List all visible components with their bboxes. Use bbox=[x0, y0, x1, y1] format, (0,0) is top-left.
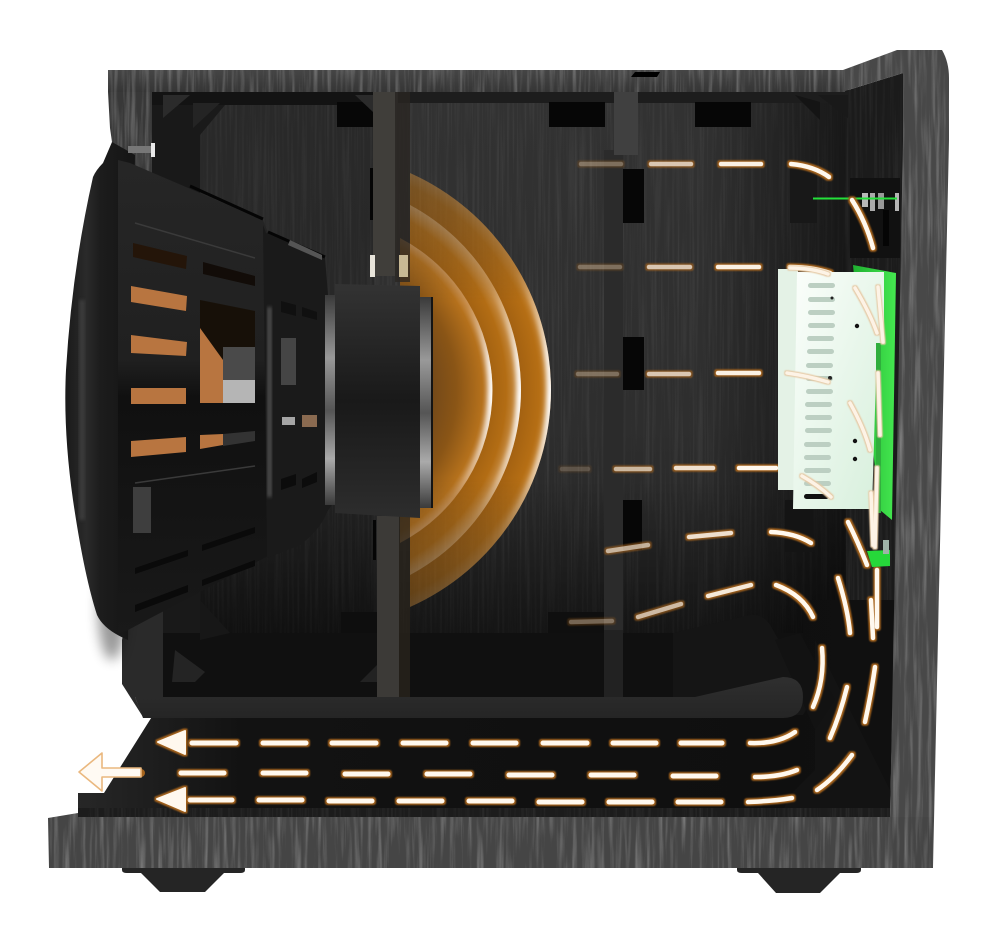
shadow: speaker bbox=[98, 560, 126, 660]
rear ring highlight bbox=[420, 297, 431, 508]
front ring bbox=[325, 295, 335, 505]
icon: right foot bbox=[737, 868, 861, 893]
airflow: pale dashes over amplifier bbox=[787, 268, 883, 547]
mounting bolt bbox=[128, 143, 155, 157]
orange slots bbox=[131, 286, 223, 457]
rear basket details bbox=[281, 301, 317, 490]
basket top shadow edge bbox=[190, 186, 325, 257]
basket front section bbox=[118, 160, 268, 634]
arrow: bottom exit bbox=[157, 788, 185, 811]
lower slots bbox=[135, 527, 255, 612]
panel: bracing blocks and corner braces bbox=[163, 95, 848, 636]
dark upper slots bbox=[133, 243, 255, 286]
surround highlight bbox=[79, 300, 85, 520]
panel: cabinet wood base bbox=[48, 813, 933, 868]
icon: small circuit board bbox=[813, 178, 900, 258]
magnet bbox=[335, 284, 420, 518]
slot window bbox=[200, 300, 255, 446]
panel: cabinet wood top bbox=[108, 70, 845, 92]
cone surround bbox=[65, 142, 135, 640]
panel: interior back wall bbox=[150, 73, 903, 700]
airflow: dashes in bottom port bbox=[181, 743, 722, 802]
arrow: top exit bbox=[158, 731, 185, 754]
icon: slot in top panel bbox=[631, 72, 660, 77]
panel: second internal divider bbox=[604, 92, 638, 700]
gray basket panel bbox=[133, 487, 151, 533]
panel: amplifier module bbox=[778, 265, 896, 520]
rear ring bbox=[420, 297, 433, 508]
basket joint highlight bbox=[267, 307, 272, 497]
basket rear section bbox=[263, 225, 335, 558]
arrow: large outlined exit bbox=[79, 753, 141, 791]
panel: bottom port chamber bbox=[78, 600, 895, 817]
icon: small green board bbox=[867, 540, 890, 567]
diagram: sound waves bbox=[400, 173, 551, 607]
airflow: dashes in main cavity bbox=[562, 164, 877, 802]
basket rim light bbox=[288, 240, 322, 260]
panel: cabinet left post upper bbox=[108, 92, 152, 185]
panel: shelf board bbox=[135, 677, 803, 718]
panel: lower floor of cabinet bbox=[163, 600, 803, 699]
icon: left foot bbox=[122, 868, 245, 892]
panel: cabinet left post lower bbox=[122, 595, 163, 717]
panel: main divider with speaker mount bbox=[370, 92, 410, 702]
panel: cabinet wood right wall bbox=[843, 50, 949, 867]
icon: speaker driver bbox=[65, 142, 433, 660]
panel: curved port wedge bbox=[673, 615, 835, 730]
ridge highlights bbox=[135, 223, 255, 483]
